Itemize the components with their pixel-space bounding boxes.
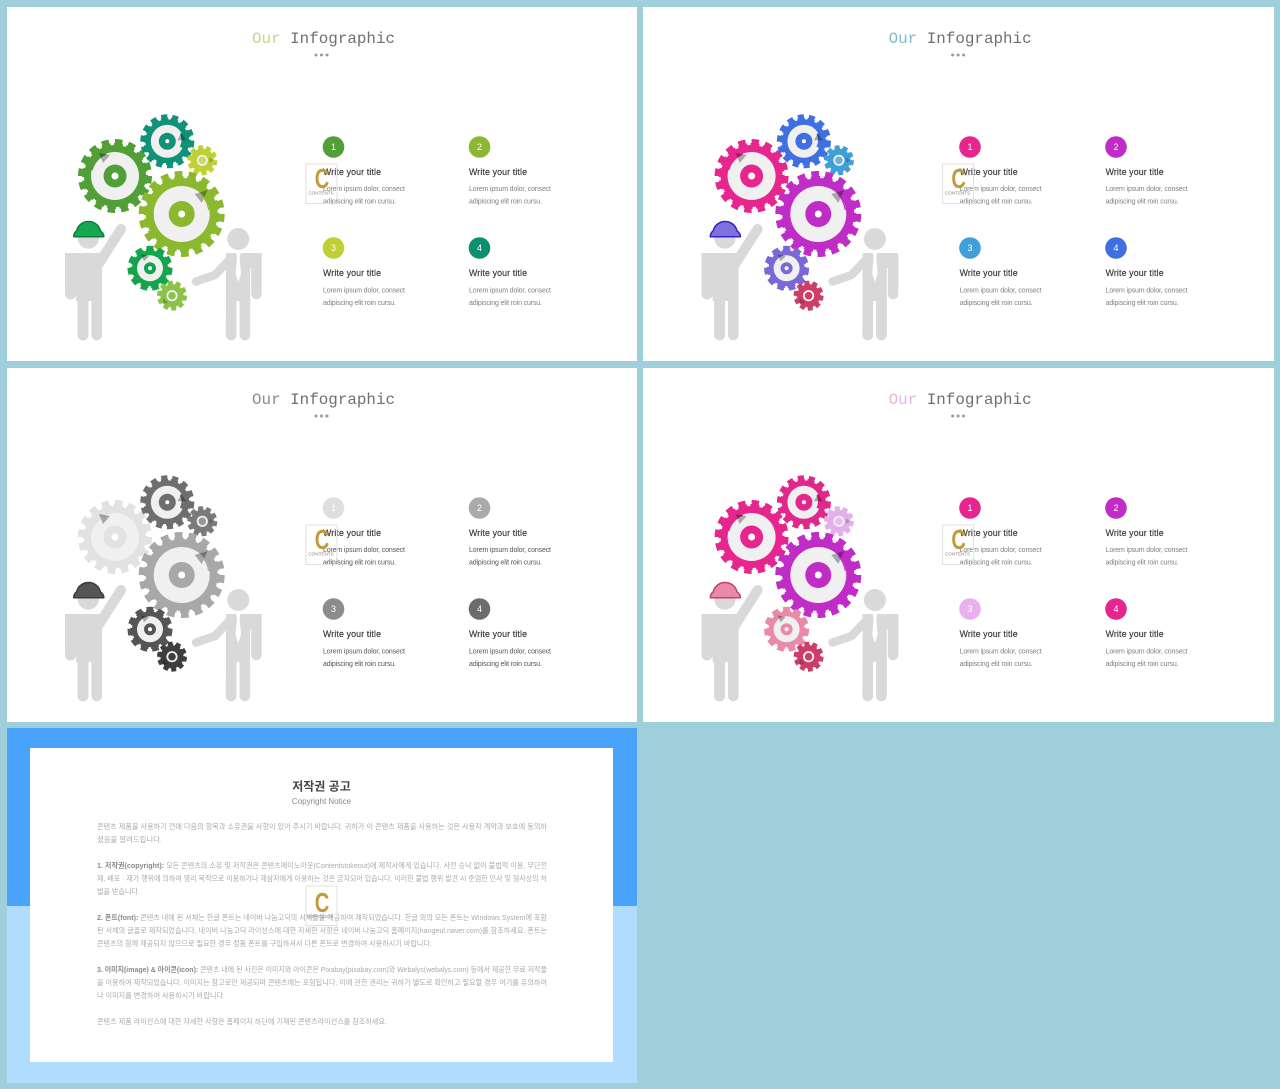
intro paragraph: 셨음을 알려드립니다. xyxy=(97,834,162,844)
subheading: Copyright Notice xyxy=(292,797,352,806)
watermark: CONTENTS xyxy=(308,190,334,196)
item 4: Write your title xyxy=(1106,629,1164,639)
item 2 xyxy=(469,497,551,566)
item 3: adipiscing elit roin cursu. xyxy=(323,300,396,307)
intro paragraph xyxy=(97,821,547,844)
gear: small bottom xyxy=(159,282,185,309)
watermark: C xyxy=(951,164,966,195)
watermark xyxy=(943,164,974,204)
person: manager with tie xyxy=(833,589,898,701)
title: Our Infographic xyxy=(252,391,395,409)
item 3 xyxy=(959,598,1042,668)
gear: small top right xyxy=(826,147,852,174)
panel: pink infographic xyxy=(643,368,1274,722)
item 1 xyxy=(959,136,1042,206)
item 4 xyxy=(1105,237,1188,307)
title: Our Infographic xyxy=(889,30,1032,48)
section 3: image and icon xyxy=(97,964,547,1000)
item 2: Write your title xyxy=(1106,167,1164,177)
item 2 xyxy=(1105,136,1188,206)
watermark: CONTENTS xyxy=(945,552,970,556)
intro paragraph: 콘텐츠 제품을 사용하기 전에 다음의 항목과 소유권을 사항이 있어 주시기 바랍니다. 귀하가 이 콘텐츠 제품을 사용하는 것은 사용자 계약과 보호에 동의하 xyxy=(97,821,547,831)
item 2: 2 xyxy=(1113,503,1119,513)
item 2: Write your title xyxy=(1106,528,1164,538)
gear: small top right xyxy=(189,147,216,174)
item 2: Lorem ipsum dolor, consect xyxy=(1106,186,1188,193)
gear: small bottom xyxy=(795,282,822,309)
icon: hard hat xyxy=(74,222,104,237)
item 2: 2 xyxy=(1113,142,1119,152)
gear: large left xyxy=(81,142,149,210)
item 3: 3 xyxy=(967,604,973,614)
panel: grey infographic xyxy=(7,368,637,722)
item 4: 4 xyxy=(477,243,482,253)
item 4 xyxy=(469,237,551,307)
item 4: 4 xyxy=(477,604,482,614)
gear: large left xyxy=(81,503,149,571)
item 1: 1 xyxy=(331,503,336,513)
title dots xyxy=(951,54,965,56)
item 4: adipiscing elit roin cursu. xyxy=(1106,300,1179,307)
item 3 xyxy=(323,598,405,668)
icon: hard hat xyxy=(710,222,740,237)
item 4: Lorem ipsum dolor, consect xyxy=(469,288,551,294)
watermark xyxy=(306,164,337,204)
panel: copyright notice xyxy=(7,728,637,1083)
gear: largest centre xyxy=(779,174,858,254)
person: worker with hard hat xyxy=(702,588,758,702)
section 2: font: 2. 폰트(font): 콘텐츠 내에 된 서체는 한글 폰트는 네이버 나눔고딕의 서체들을 제공하여 제작되었습니다. 한글 외의 모든 폰트는 Windows System에 포함 xyxy=(97,912,547,922)
item 3: Write your title xyxy=(960,268,1018,278)
item 2 xyxy=(469,136,551,206)
item 4: Lorem ipsum dolor, consect xyxy=(1106,288,1188,294)
icon: hard hat xyxy=(74,582,104,598)
item 1: adipiscing elit roin cursu. xyxy=(960,198,1033,206)
item 1: adipiscing elit roin cursu. xyxy=(323,560,396,566)
item 4: adipiscing elit roin cursu. xyxy=(469,300,542,307)
watermark: C xyxy=(315,888,329,919)
title dots xyxy=(314,414,328,418)
item 1 xyxy=(959,497,1042,566)
item 1 xyxy=(323,136,405,206)
watermark xyxy=(943,525,974,564)
item 2: Lorem ipsum dolor, consect xyxy=(469,547,551,554)
item 1: 1 xyxy=(967,503,973,513)
person: manager with tie xyxy=(833,228,898,340)
item 2: 2 xyxy=(477,503,482,513)
illustration: gears and two people xyxy=(702,117,898,340)
item 4: Write your title xyxy=(469,629,527,639)
person: worker with hard hat xyxy=(65,227,121,340)
item 3: Lorem ipsum dolor, consect xyxy=(323,288,405,294)
item 1: Write your title xyxy=(323,167,381,177)
gear: small top right xyxy=(826,508,852,534)
gear: top xyxy=(143,478,192,527)
gear: small bottom xyxy=(795,644,822,670)
gear: large left xyxy=(718,503,786,571)
gear: largest centre xyxy=(142,536,221,614)
item 4: adipiscing elit roin cursu. xyxy=(469,661,542,668)
item 4: 4 xyxy=(1113,243,1119,253)
item 3: Write your title xyxy=(323,629,381,639)
item 4 xyxy=(469,598,551,668)
item 4: adipiscing elit roin cursu. xyxy=(1106,661,1179,668)
item 1: Write your title xyxy=(960,528,1018,538)
item 1: Lorem ipsum dolor, consect xyxy=(323,547,405,554)
item 3: Lorem ipsum dolor, consect xyxy=(960,648,1042,656)
illustration: gears and two people xyxy=(65,117,262,340)
title dots xyxy=(951,414,965,418)
item 1: 1 xyxy=(331,142,336,152)
item 1: Lorem ipsum dolor, consect xyxy=(960,547,1042,554)
gear: small top right xyxy=(189,508,216,534)
section 1: copyright: 1. 저작권(copyright): 모든 콘텐츠의 소유 및 저작권은 콘텐츠메이노아웃(Contentstokeout)에 제작사에게 있습니다. 사전 승낙 없이 불법적 이용, 무단전 xyxy=(97,860,547,870)
item 2: Write your title xyxy=(469,528,527,538)
item 4 xyxy=(1105,598,1188,668)
section 3: image and icon: 3. 이미지(image) & 아이콘(icon): 콘텐츠 내에 된 사진은 이미지와 아이콘은 Pixabay(pixabay.com)와 Webalys(webalys.com) 등에서 제공한 무료 저작물 xyxy=(97,964,547,974)
item 3: Write your title xyxy=(323,268,381,278)
gear: top xyxy=(779,117,828,166)
section 1: copyright: 재, 배포 · 재가 행위에 의하여 영리 목적으로 이용하거나 제삼자에게 이용하는 것은 금지되어 있습니다. 이러한 불법 행위 발견 시 준엄한 민사 및 형사상의 처 xyxy=(97,873,547,883)
gear: largest centre xyxy=(779,536,858,614)
section 3: image and icon: 을 이용하여 제작되었습니다. 이미지는 참고로만 제공되며 콘텐츠에는 포함됩니다. 이에 관한 권리는 귀하가 별도로 확인하고 필요할 경우 여기를 유의하여 xyxy=(97,977,547,987)
item 2: adipiscing elit roin cursu. xyxy=(469,560,542,566)
section 2: font: 콘텐츠의 함께 제공되지 않으므로 필요한 경우 정품 폰트를 구입하셔서 다른 폰트로 변경하여 사용하시기 바랍니다. xyxy=(97,938,432,948)
item 1: adipiscing elit roin cursu. xyxy=(960,560,1033,566)
item 2: Lorem ipsum dolor, consect xyxy=(1106,547,1188,554)
gear: top xyxy=(779,478,828,527)
item 1: 1 xyxy=(967,142,973,152)
section 2: font xyxy=(97,912,547,948)
item 2: adipiscing elit roin cursu. xyxy=(469,198,542,206)
item 2: adipiscing elit roin cursu. xyxy=(1106,198,1179,206)
title dots xyxy=(314,54,328,56)
item 4: Lorem ipsum dolor, consect xyxy=(1106,648,1188,656)
item 4: Write your title xyxy=(469,268,527,278)
item 2: Write your title xyxy=(469,167,527,177)
person: worker with hard hat xyxy=(65,588,121,702)
section 1: copyright xyxy=(97,860,547,896)
item 2: adipiscing elit roin cursu. xyxy=(1106,560,1179,566)
item 3: Lorem ipsum dolor, consect xyxy=(960,288,1042,294)
item 1: adipiscing elit roin cursu. xyxy=(323,198,396,206)
watermark xyxy=(306,525,337,564)
panel: pink and blue infographic xyxy=(643,7,1274,361)
section 1: copyright: 벌을 받습니다. xyxy=(97,886,140,896)
illustration: gears and two people xyxy=(65,478,262,702)
item 2: Lorem ipsum dolor, consect xyxy=(469,186,551,193)
section 3: image and icon: 나 이미지를 변경하여 사용하시기 바랍니다. xyxy=(97,990,225,1000)
person: worker with hard hat xyxy=(702,227,758,340)
item 3: adipiscing elit roin cursu. xyxy=(960,661,1033,668)
watermark: CONTENTS xyxy=(308,914,334,919)
item 3: adipiscing elit roin cursu. xyxy=(323,661,396,668)
gear: largest centre xyxy=(142,174,221,254)
item 3: 3 xyxy=(331,243,336,253)
item 4: Lorem ipsum dolor, consect xyxy=(469,648,551,656)
watermark: CONTENTS xyxy=(308,552,334,556)
watermark: C xyxy=(951,525,966,556)
item 3 xyxy=(959,237,1042,307)
item 3: 3 xyxy=(331,604,336,614)
title: Our Infographic xyxy=(252,30,395,48)
illustration: gears and two people xyxy=(702,478,898,702)
item 1: Write your title xyxy=(323,528,381,538)
item 3: Write your title xyxy=(960,629,1018,639)
item 3: Lorem ipsum dolor, consect xyxy=(323,648,405,656)
watermark: CONTENTS xyxy=(945,190,970,196)
icon: hard hat xyxy=(710,582,740,598)
person: manager with tie xyxy=(196,589,262,701)
item 4: 4 xyxy=(1113,604,1119,614)
gear: lower xyxy=(766,609,807,650)
item 2: 2 xyxy=(477,142,482,152)
closing line: 콘텐츠 제품 라이선스에 대한 자세한 사항은 홈페이지 하단에 기재된 콘텐츠라이선스를 참조하세요. xyxy=(97,1016,387,1026)
gear: lower xyxy=(130,609,170,650)
watermark xyxy=(306,886,337,926)
item 3: adipiscing elit roin cursu. xyxy=(960,300,1033,307)
item 3: 3 xyxy=(967,243,973,253)
item 1: Lorem ipsum dolor, consect xyxy=(323,186,405,193)
item 1: Write your title xyxy=(960,167,1018,177)
panel: green infographic xyxy=(7,7,637,361)
section 2: font: 된 서체의 글꼴로 제작되었습니다. 네이버 나눔고딕 라이선스에 대한 자세한 사항은 네이버 나눔고딕 홈페이지(hangeul.naver.com)를 참조하세요. 폰트는 xyxy=(97,925,547,935)
gear: small bottom xyxy=(159,644,185,670)
item 1 xyxy=(323,497,405,566)
item 1: Lorem ipsum dolor, consect xyxy=(960,186,1042,193)
gear: large left xyxy=(718,142,786,210)
heading: 저작권 공고 xyxy=(292,778,351,794)
title: Our Infographic xyxy=(889,391,1032,409)
gear: lower xyxy=(766,248,807,289)
item 3 xyxy=(323,237,405,307)
watermark: C xyxy=(315,164,329,195)
gear: top xyxy=(143,117,192,166)
item 2 xyxy=(1105,497,1188,566)
gear: lower xyxy=(130,248,170,289)
watermark: C xyxy=(315,525,329,556)
item 4: Write your title xyxy=(1106,268,1164,278)
person: manager with tie xyxy=(196,228,262,340)
